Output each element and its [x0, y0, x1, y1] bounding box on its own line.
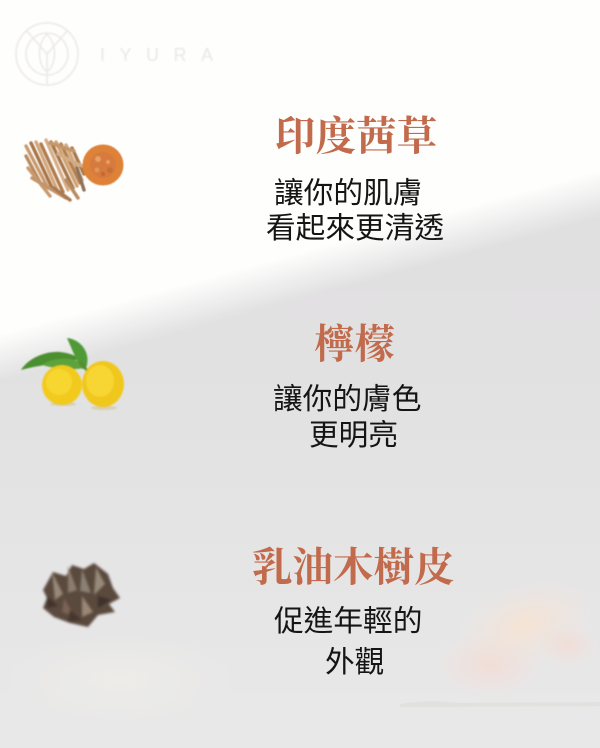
heading: shea tree bark: 乳油木樹皮 — [252, 545, 454, 590]
lemon shadows — [50, 402, 117, 410]
root pile — [26, 140, 84, 200]
lemon left — [42, 365, 82, 405]
text: Indian madder benefit line 2: 看起來更清透 — [266, 212, 444, 245]
text: Indian madder benefit: 讓你的肌膚 — [274, 177, 422, 210]
text: shea bark benefit line 2: 外觀 — [325, 646, 384, 679]
logo emblem — [16, 23, 78, 85]
heading: Indian madder: 印度茜草 — [275, 114, 437, 159]
heading: lemon: 檸檬 — [314, 322, 395, 367]
text: lemon benefit: 讓你的膚色 — [273, 383, 421, 416]
text: shea bark benefit: 促進年輕的 — [274, 605, 422, 638]
text: lemon benefit line 2: 更明亮 — [309, 419, 398, 452]
icon: lemons with leaves — [20, 337, 125, 410]
powder disc — [82, 144, 124, 186]
logo: IYURA — [15, 22, 219, 86]
leaves — [21, 338, 88, 372]
icon: shea tree bark — [42, 562, 122, 628]
lemon right — [82, 361, 124, 407]
icon: Indian madder roots and powder — [24, 138, 124, 202]
